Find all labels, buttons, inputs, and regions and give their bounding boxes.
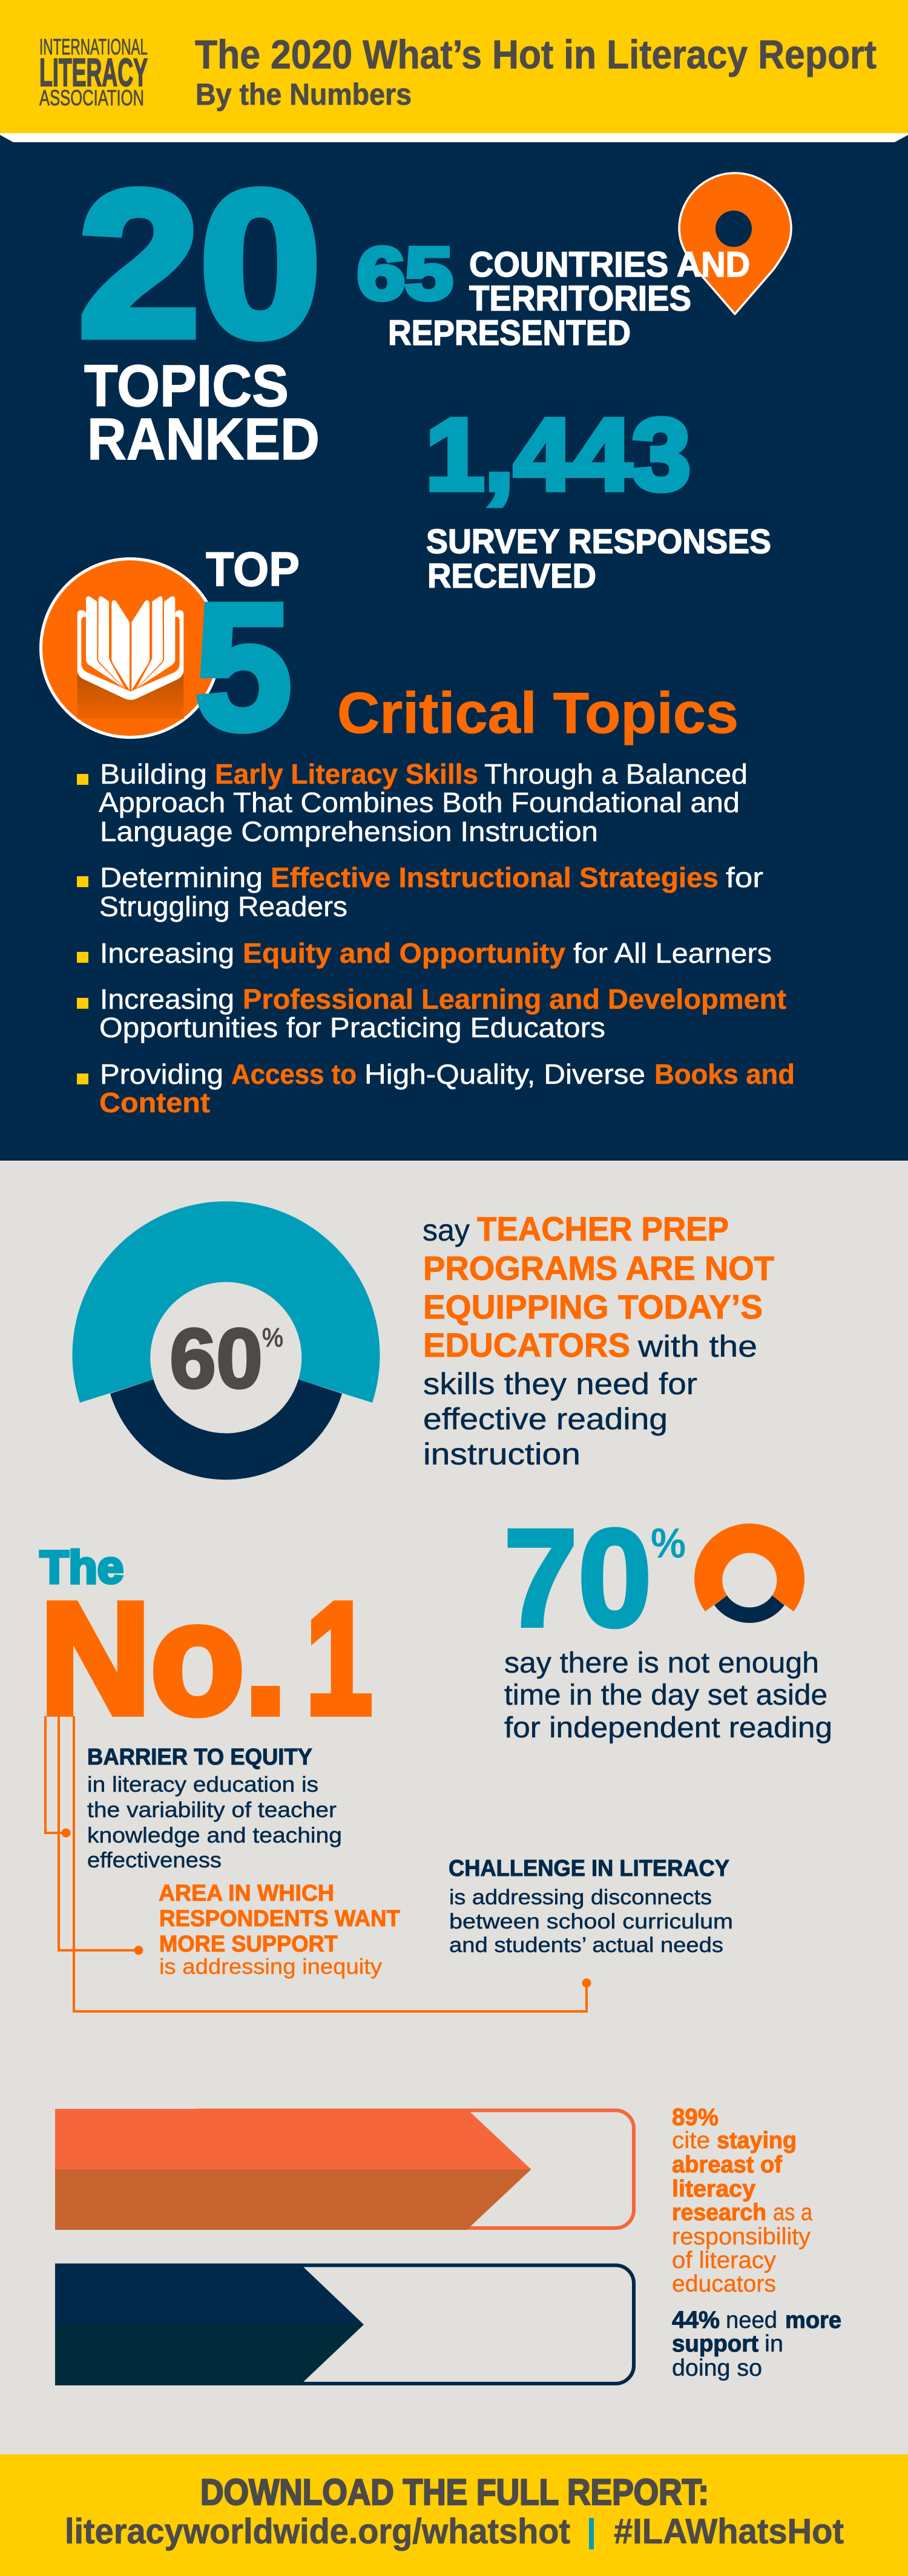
text: not enough time: say there is not enough [504, 1647, 819, 1679]
number 5: 5 [195, 566, 292, 767]
stat: 20 topics ranked [79, 148, 321, 472]
text: 89 percent: educators [672, 2271, 776, 2297]
text: 44 percent: 44% [672, 2307, 720, 2333]
text: barrier to equity: in literacy education is [87, 1772, 318, 1797]
value 70 percent: 70 [504, 1500, 652, 1656]
panel: grey section [0, 1161, 908, 2454]
label countries and territories represented: REPRESENTED [388, 313, 631, 353]
text: teacher prep programs: EDUCATORS [423, 1326, 630, 1364]
text: 89 percent: staying [717, 2128, 797, 2154]
panel: navy stats section [0, 133, 908, 1161]
text: teacher prep programs: EQUIPPING TODAY’S [423, 1288, 763, 1326]
text: 89 percent: abreast of [672, 2152, 783, 2178]
logo: International Literacy Association: ASSOCIATION [39, 85, 144, 110]
text: teacher prep programs: PROGRAMS ARE NOT [423, 1249, 774, 1287]
donut teal segment [73, 1201, 380, 1403]
number no. 1: No. [40, 1570, 287, 1747]
text: barrier to equity [87, 1745, 342, 1872]
text: 89 percent: research [672, 2200, 766, 2226]
text: challenge in literacy: and students’ actual needs [449, 1933, 723, 1957]
text: 44 percent [672, 2307, 841, 2381]
label topics ranked [84, 353, 320, 472]
text: 44 percent: in [765, 2331, 783, 2357]
footer hashtag: #ILAWhatsHot [614, 2512, 844, 2551]
label countries and territories represented: COUNTRIES AND [469, 245, 750, 284]
footer link: literacyworldwide.org/whatshot [65, 2512, 570, 2551]
value 60 percent: 60 [169, 1311, 263, 1406]
text: 44 percent: support [672, 2331, 758, 2357]
item 3 [77, 937, 772, 969]
footer yellow background [0, 2454, 908, 2576]
item 2: for [726, 862, 763, 893]
item 1 [77, 758, 748, 847]
text: area in which respondents want more support [159, 1881, 400, 1979]
word the: The [40, 1542, 123, 1593]
text: challenge in literacy: is addressing disconnects [449, 1886, 712, 1909]
logo: International Literacy Association [39, 34, 148, 110]
stat: 65 countries and territories [357, 173, 791, 353]
item 5: Access to [231, 1058, 357, 1090]
text: 89 percent: of literacy [672, 2247, 777, 2273]
label survey responses received [426, 522, 771, 595]
text: area in which respondents want more support: MORE SUPPORT [159, 1932, 338, 1957]
footer divider [589, 2518, 594, 2549]
stat: 1,443 survey responses [426, 398, 771, 595]
word top: TOP [206, 542, 300, 596]
item 4 [77, 983, 786, 1043]
text: area in which respondents want more support: AREA IN WHICH [159, 1881, 334, 1906]
item 3: Equity and Opportunity [243, 937, 565, 969]
item 2: Struggling Readers [99, 891, 347, 922]
text: challenge in literacy: between school curriculum [449, 1910, 733, 1933]
text: teacher prep programs: skills they need for [423, 1367, 697, 1401]
label survey responses received: SURVEY RESPONSES [426, 522, 771, 561]
chart: 89 percent progress bar [55, 2109, 634, 2230]
item 1: Early Literacy Skills [215, 758, 478, 790]
item 3: for All Learners [573, 937, 772, 969]
text: area in which respondents want more support: RESPONDENTS WANT [159, 1906, 400, 1932]
item 1: Building [100, 758, 207, 790]
item 4: Professional Learning and Development [243, 983, 786, 1015]
number 20: 20 [79, 148, 321, 379]
text: 89 percent: responsibility [672, 2224, 811, 2250]
label topics ranked: RANKED [87, 406, 320, 472]
item 1: Approach That Combines Both Foundational and [99, 787, 740, 818]
item 5: High-Quality, Diverse [364, 1058, 645, 1090]
item 5: Providing [100, 1058, 223, 1090]
list: top 5 critical topics [77, 758, 795, 1118]
number 1,443: 1,443 [426, 398, 691, 511]
text: area in which respondents want more support: is addressing inequity [159, 1954, 382, 1979]
item 4: Increasing [100, 983, 234, 1015]
donut navy segment [110, 1380, 342, 1480]
item 5 [77, 1058, 795, 1118]
text: teacher prep programs: TEACHER PREP [477, 1210, 729, 1248]
text: not enough time [504, 1647, 832, 1744]
icon: map pin [679, 173, 791, 314]
item 2 [77, 862, 763, 922]
text: teacher prep programs: instruction [423, 1437, 581, 1471]
subtitle: By the Numbers [196, 77, 412, 111]
text: 89 percent: 89% [672, 2104, 719, 2131]
text: 44 percent: more [785, 2307, 841, 2333]
text: barrier to equity: BARRIER TO EQUITY [87, 1745, 312, 1770]
item 2: Determining [100, 862, 263, 893]
text: 89 percent: cite [672, 2128, 710, 2154]
text: 89 percent: literacy [672, 2176, 755, 2202]
number no. 1: 1 [306, 1570, 372, 1747]
connector lines from No. 1 [45, 1716, 591, 2011]
label countries and territories represented: TERRITORIES [469, 279, 691, 318]
label countries and territories represented [388, 245, 750, 353]
chart: 70 percent donut [694, 1524, 804, 1623]
text: teacher prep programs [423, 1210, 774, 1471]
value 60 percent: % [262, 1323, 283, 1352]
footer call to action: DOWNLOAD THE FULL REPORT: [200, 2472, 709, 2512]
footer banner [0, 2454, 908, 2576]
text: teacher prep programs: say [423, 1213, 470, 1247]
chart: 44 percent progress bar [55, 2263, 634, 2385]
item 1: Through a Balanced [484, 758, 748, 790]
text: barrier to equity: the variability of teacher [87, 1797, 337, 1822]
words critical topics: Critical Topics [337, 681, 739, 746]
number 65: 65 [357, 232, 453, 315]
text: not enough time: time in the day set aside [504, 1679, 827, 1711]
label topics ranked: TOPICS [84, 353, 289, 419]
item 2: Effective Instructional Strategies [271, 862, 719, 893]
logo: International Literacy Association: INTERNATIONAL [39, 34, 148, 59]
text: 89 percent [672, 2104, 812, 2297]
item 4: Opportunities for Practicing Educators [99, 1012, 605, 1043]
icon: open book in orange circle [39, 557, 221, 739]
chart: 60 percent donut [73, 1201, 380, 1480]
label survey responses received: RECEIVED [427, 557, 596, 595]
stat: 70 percent [504, 1500, 832, 1744]
header white ribbon [0, 133, 908, 142]
text: 89 percent: as a [773, 2200, 812, 2226]
text: 44 percent: need [726, 2307, 777, 2333]
header yellow background [0, 0, 908, 133]
heading: the no. 1 [40, 1542, 372, 1747]
item 5: Content [99, 1087, 210, 1118]
value 70 percent: % [651, 1519, 686, 1567]
text: teacher prep programs: with the [637, 1329, 757, 1363]
logo: International Literacy Association: LITERACY [39, 50, 148, 94]
text: barrier to equity: effectiveness [87, 1847, 222, 1872]
item 1: Language Comprehension Instruction [100, 816, 598, 847]
header banner [0, 0, 908, 142]
text: not enough time: for independent reading [504, 1712, 832, 1744]
text: challenge in literacy: CHALLENGE IN LITERACY [449, 1856, 729, 1881]
item 5: Books and [654, 1058, 795, 1090]
text: 44 percent: doing so [672, 2355, 762, 2381]
text: challenge in literacy [449, 1856, 733, 1957]
text: teacher prep programs: effective reading [423, 1402, 668, 1436]
item 3: Increasing [100, 937, 234, 969]
heading: top 5 critical topics [195, 542, 739, 767]
text: barrier to equity: knowledge and teaching [87, 1823, 342, 1847]
